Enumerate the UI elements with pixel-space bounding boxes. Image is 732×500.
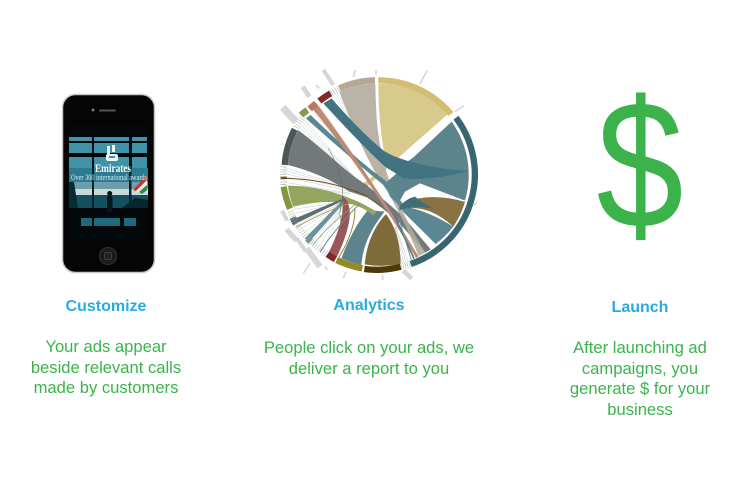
heading: Customize: Customize	[66, 298, 146, 315]
thin chords	[281, 148, 414, 260]
text: customize description: made by customers	[34, 378, 178, 397]
text: analytics description: deliver a report to you	[289, 358, 449, 378]
text: launch description	[570, 338, 710, 418]
chord: teal to lower right	[306, 115, 453, 244]
text: launch description: After launching ad	[573, 338, 707, 357]
text: launch description: generate $ for your	[570, 379, 710, 398]
chord: dark red	[329, 196, 350, 257]
icon: smartphone showing Emirates ad: Emirates	[95, 161, 131, 175]
tiny chord labels rendered as grey blurs	[282, 70, 477, 280]
text: analytics description	[264, 338, 474, 378]
text: customize description: Your ads appear	[45, 337, 167, 356]
chord: bottom teal	[341, 210, 385, 265]
heading: Launch: Launch	[612, 299, 668, 316]
icon: dollar sign: $	[596, 63, 684, 267]
outer arc segments	[283, 80, 475, 270]
text: customize description	[31, 337, 181, 397]
chord: olive	[288, 186, 377, 216]
text: customize description: beside relevant calls	[31, 358, 181, 376]
icon: smartphone showing Emirates ad: Over 300 international awards	[71, 172, 147, 182]
text: launch description: business	[607, 400, 673, 418]
text: launch description: campaigns, you	[582, 358, 698, 378]
chord: bottom brown	[365, 214, 401, 266]
chord: brown right	[400, 197, 465, 227]
chord: salmon	[310, 103, 419, 258]
chord: grey	[288, 130, 431, 253]
thin connector stripes	[283, 93, 408, 264]
chord: grey-tan	[339, 84, 425, 256]
chord: tan	[353, 84, 449, 194]
chord: large teal	[385, 122, 469, 204]
chord: dark teal strip	[323, 98, 469, 179]
heading: Analytics: Analytics	[333, 297, 405, 314]
text: analytics description: People click on your ads, we	[264, 338, 474, 357]
